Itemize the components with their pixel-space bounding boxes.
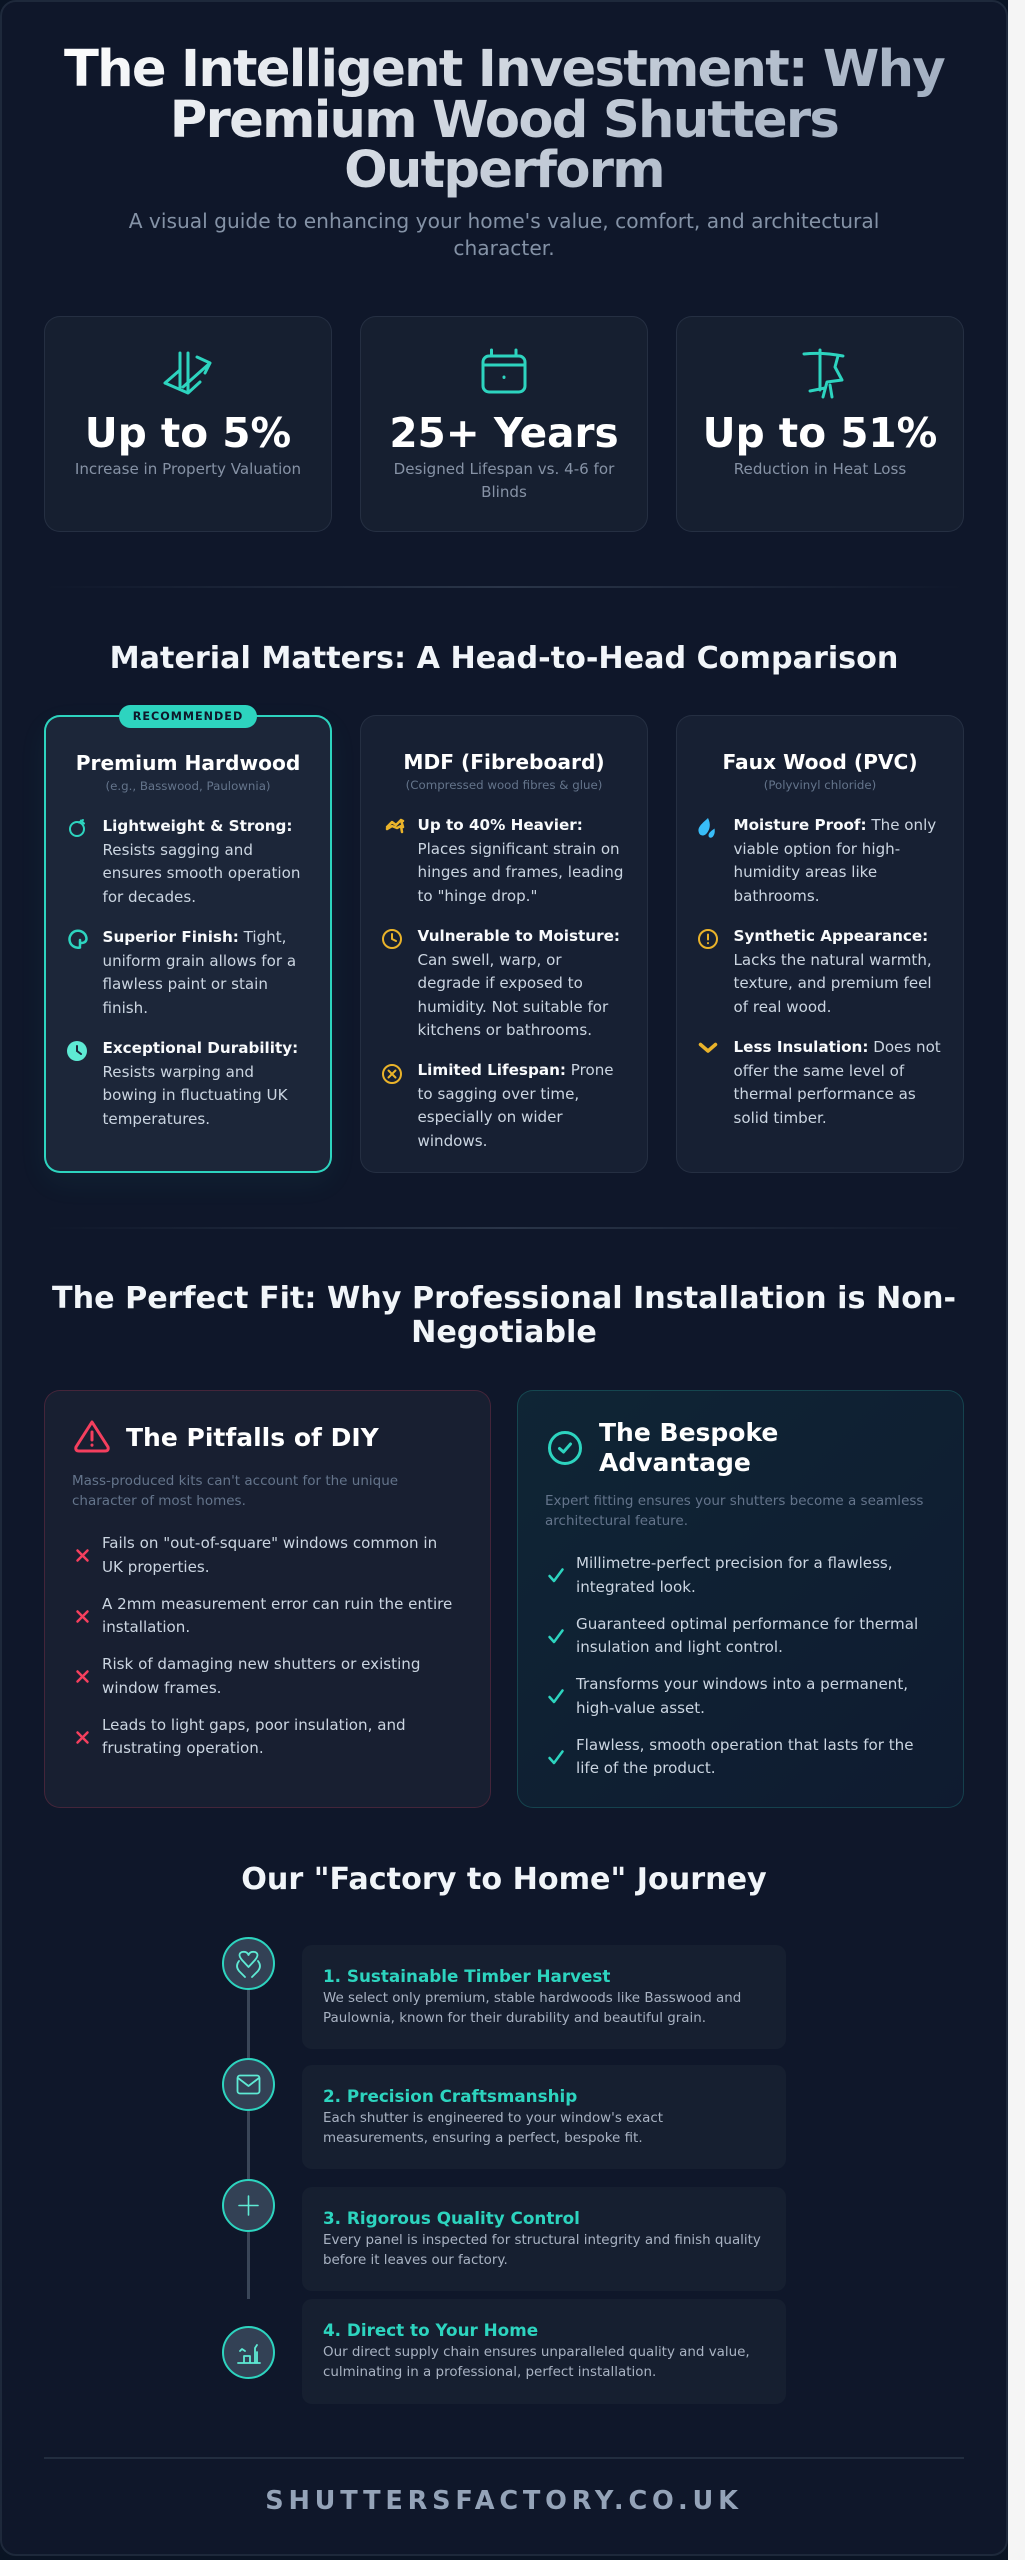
title: Premium Wood Shutters — [170, 90, 838, 150]
item: superior finish: Superior Finish: Tight, — [102, 928, 286, 946]
item: durability: Exceptional Durability: — [102, 1039, 298, 1057]
subtitle — [129, 209, 879, 260]
step text: Each shutter is engineered to your window's exact — [323, 2110, 663, 2126]
stat label: Reduction in Heat Loss — [734, 460, 906, 478]
item: UK properties. — [102, 1558, 210, 1576]
subtitle: character. — [453, 236, 555, 260]
panel: mdf — [360, 715, 648, 1173]
item — [76, 1716, 406, 1757]
heading: factory to home journey: Our "Factory to Home" Journey — [241, 1862, 767, 1897]
item: moisture proof: bathrooms. — [734, 886, 820, 904]
stat label: Blinds — [481, 483, 527, 501]
timeline line — [247, 1963, 250, 2299]
item: synthetic appearance: Lacks the natural warmth, — [734, 950, 932, 968]
item: A 2mm measurement error can ruin the entire — [102, 1594, 452, 1612]
item: synthetic appearance — [698, 927, 932, 1016]
item: Fails on "out-of-square" windows common in — [102, 1534, 437, 1552]
step 2 node icon: envelope — [222, 2058, 275, 2111]
step text: We select only premium, stable hardwoods like Basswood and — [323, 1990, 741, 2006]
heading: Premium Hardwood — [76, 751, 300, 775]
item: moisture proof: viable option for high- — [734, 840, 900, 858]
item: moisture: Can swell, warp, or — [418, 950, 562, 968]
step title: 2. Precision Craftsmanship — [323, 2086, 577, 2106]
item: heavier: Places significant strain on — [418, 840, 620, 858]
item: less insulation: thermal performance as — [734, 1085, 916, 1103]
item — [548, 1554, 893, 1596]
item: moisture: Vulnerable to Moisture: — [418, 927, 620, 945]
step text — [323, 1990, 741, 2026]
item: synthetic appearance: texture, and premium feel — [734, 974, 932, 992]
item: Transforms your windows into a permanent, — [576, 1675, 908, 1693]
icon: warning triangle — [74, 1420, 110, 1452]
item: Leads to light gaps, poor insulation, and — [102, 1716, 406, 1734]
heading: the perfect fit: Negotiable — [411, 1314, 597, 1350]
item: integrated look. — [576, 1578, 696, 1596]
item: high-value asset. — [576, 1698, 705, 1716]
item: moisture proof — [698, 816, 936, 904]
item: lifespan: especially on wider — [418, 1108, 563, 1126]
item: durability: bowing in fluctuating UK — [102, 1086, 287, 1104]
item: synthetic appearance: of real wood. — [734, 998, 831, 1016]
item: lightweight: Resists sagging and — [102, 840, 253, 858]
heading: the perfect fit: The Perfect Fit: Why Professional Installation is Non- — [52, 1281, 956, 1316]
step text: Every panel is inspected for structural integrity and finish quality — [323, 2232, 761, 2248]
title — [44, 44, 964, 202]
subheading: (e.g., Basswood, Paulownia) — [105, 779, 271, 793]
item: durability: temperatures. — [102, 1110, 210, 1128]
item: lifespan: Limited Lifespan: Prone — [418, 1061, 614, 1079]
item: lifespan: to sagging over time, — [418, 1084, 579, 1102]
item — [548, 1675, 908, 1716]
item: Risk of damaging new shutters or existing — [102, 1655, 420, 1673]
footer brand: SHUTTERSFACTORY.CO.UK — [265, 2486, 743, 2516]
step title: 3. Rigorous Quality Control — [323, 2208, 580, 2228]
icon: check circle — [548, 1431, 582, 1465]
item: superior finish: flawless paint or stain — [102, 975, 268, 993]
item: heavier: hinges and frames, leading — [418, 863, 623, 881]
item: lightweight — [69, 817, 300, 906]
title: Outperform — [344, 140, 664, 200]
step 4 card — [302, 2299, 786, 2404]
subheading: (Polyvinyl chloride) — [764, 778, 876, 792]
item: frustrating operation. — [102, 1739, 264, 1757]
step 4 node icon: factory — [222, 2326, 275, 2379]
stat value: Up to 5% — [85, 409, 291, 457]
item — [76, 1594, 452, 1636]
panel: faux wood — [676, 715, 964, 1173]
heading: Advantage — [599, 1448, 751, 1477]
item: moisture proof: Moisture Proof: The only — [734, 816, 936, 834]
item: moisture — [382, 927, 620, 1039]
step text: before it leaves our factory. — [323, 2253, 508, 2268]
panel: pitfalls of DIY — [44, 1390, 491, 1808]
item: durability: Resists warping and — [102, 1062, 254, 1080]
item: less insulation: solid timber. — [734, 1108, 827, 1126]
item: life of the product. — [576, 1759, 716, 1777]
item: Millimetre-perfect precision for a flawless, — [576, 1554, 893, 1572]
item: superior finish — [68, 928, 296, 1016]
panel: stat heat loss — [676, 316, 964, 532]
item: moisture: humidity. Not suitable for — [418, 998, 608, 1016]
item — [548, 1614, 918, 1656]
heading: Faux Wood (PVC) — [722, 750, 918, 774]
description — [545, 1493, 923, 1529]
item: moisture: kitchens or bathrooms. — [418, 1021, 592, 1039]
item: lightweight: for decades. — [102, 888, 196, 906]
step 1 node icon: hearts — [222, 1937, 275, 1990]
step 2 card — [302, 2065, 786, 2169]
step text — [323, 2344, 750, 2380]
item: moisture proof: humidity areas like — [734, 863, 877, 881]
icon: growth arrows — [163, 352, 212, 394]
item: less insulation: Less Insulation: Does not — [734, 1038, 941, 1056]
subheading: (Compressed wood fibres & glue) — [406, 778, 602, 792]
stat label — [394, 460, 614, 501]
item: insulation and light control. — [576, 1638, 783, 1656]
step text: Paulownia, known for their durability and beautiful grain. — [323, 2011, 706, 2026]
stat value: 25+ Years — [389, 409, 619, 457]
step text: culminating in a professional, perfect installation. — [323, 2365, 656, 2380]
heading: the perfect fit — [52, 1281, 956, 1350]
stat value: Up to 51% — [703, 409, 937, 457]
heading — [599, 1418, 778, 1477]
stat label: Increase in Property Valuation — [75, 460, 301, 478]
description: Mass-produced kits can't account for the unique — [72, 1473, 398, 1489]
item: less insulation: offer the same level of — [734, 1062, 904, 1080]
item: lifespan — [382, 1061, 614, 1150]
panel: stat property valuation — [44, 316, 332, 532]
panel: stat lifespan — [360, 316, 648, 532]
description — [72, 1473, 398, 1509]
icon: shutter — [802, 348, 844, 398]
description: architectural feature. — [545, 1513, 688, 1529]
subtitle: A visual guide to enhancing your home's value, comfort, and architectural — [129, 209, 879, 233]
description: character of most homes. — [72, 1493, 246, 1509]
item: installation. — [102, 1618, 190, 1636]
item — [76, 1534, 437, 1576]
item — [76, 1655, 420, 1696]
item: superior finish: finish. — [102, 998, 148, 1016]
step 3 card — [302, 2187, 786, 2291]
item: lightweight: ensures smooth operation — [102, 864, 300, 882]
item: Guaranteed optimal performance for thermal — [576, 1614, 918, 1632]
badge: recommended — [119, 705, 257, 728]
heading: material matters: Material Matters: A Head-to-Head Comparison — [110, 641, 898, 676]
heading: The Pitfalls of DIY — [126, 1422, 379, 1452]
item: window frames. — [102, 1678, 221, 1696]
description: Expert fitting ensures your shutters become a seamless — [545, 1493, 923, 1509]
step text: Our direct supply chain ensures unparalleled quality and value, — [323, 2344, 750, 2360]
step text — [323, 2232, 761, 2268]
item: superior finish: uniform grain allows for a — [102, 952, 296, 970]
step 3 node icon: plus — [222, 2179, 275, 2232]
item: less insulation — [698, 1038, 941, 1126]
item: lifespan: windows. — [418, 1132, 487, 1150]
item: durability — [67, 1039, 298, 1128]
panel: bespoke advantage — [517, 1390, 964, 1808]
item: synthetic appearance: Synthetic Appearance: — [734, 927, 928, 945]
heading: The Bespoke — [599, 1418, 778, 1447]
step title: 1. Sustainable Timber Harvest — [323, 1966, 610, 1986]
heading: MDF (Fibreboard) — [403, 750, 605, 774]
item: heavier — [386, 816, 623, 904]
panel: premium hardwood — [44, 715, 332, 1173]
step text — [323, 2110, 663, 2146]
item: heavier: to "hinge drop." — [418, 886, 537, 904]
step 1 card — [302, 1945, 786, 2049]
item: heavier: Up to 40% Heavier: — [418, 816, 583, 834]
title: The Intelligent Investment: Why — [64, 39, 944, 99]
item: Flawless, smooth operation that lasts for the — [576, 1736, 914, 1754]
stat label: Designed Lifespan vs. 4-6 for — [394, 460, 614, 478]
step text: measurements, ensuring a perfect, bespoke fit. — [323, 2131, 643, 2146]
item: lightweight: Lightweight & Strong: — [102, 817, 293, 835]
item: moisture: degrade if exposed to — [418, 974, 583, 992]
icon: calendar — [482, 348, 526, 394]
badge: recommended: RECOMMENDED — [133, 710, 243, 723]
step title: 4. Direct to Your Home — [323, 2320, 538, 2340]
item — [548, 1736, 914, 1777]
